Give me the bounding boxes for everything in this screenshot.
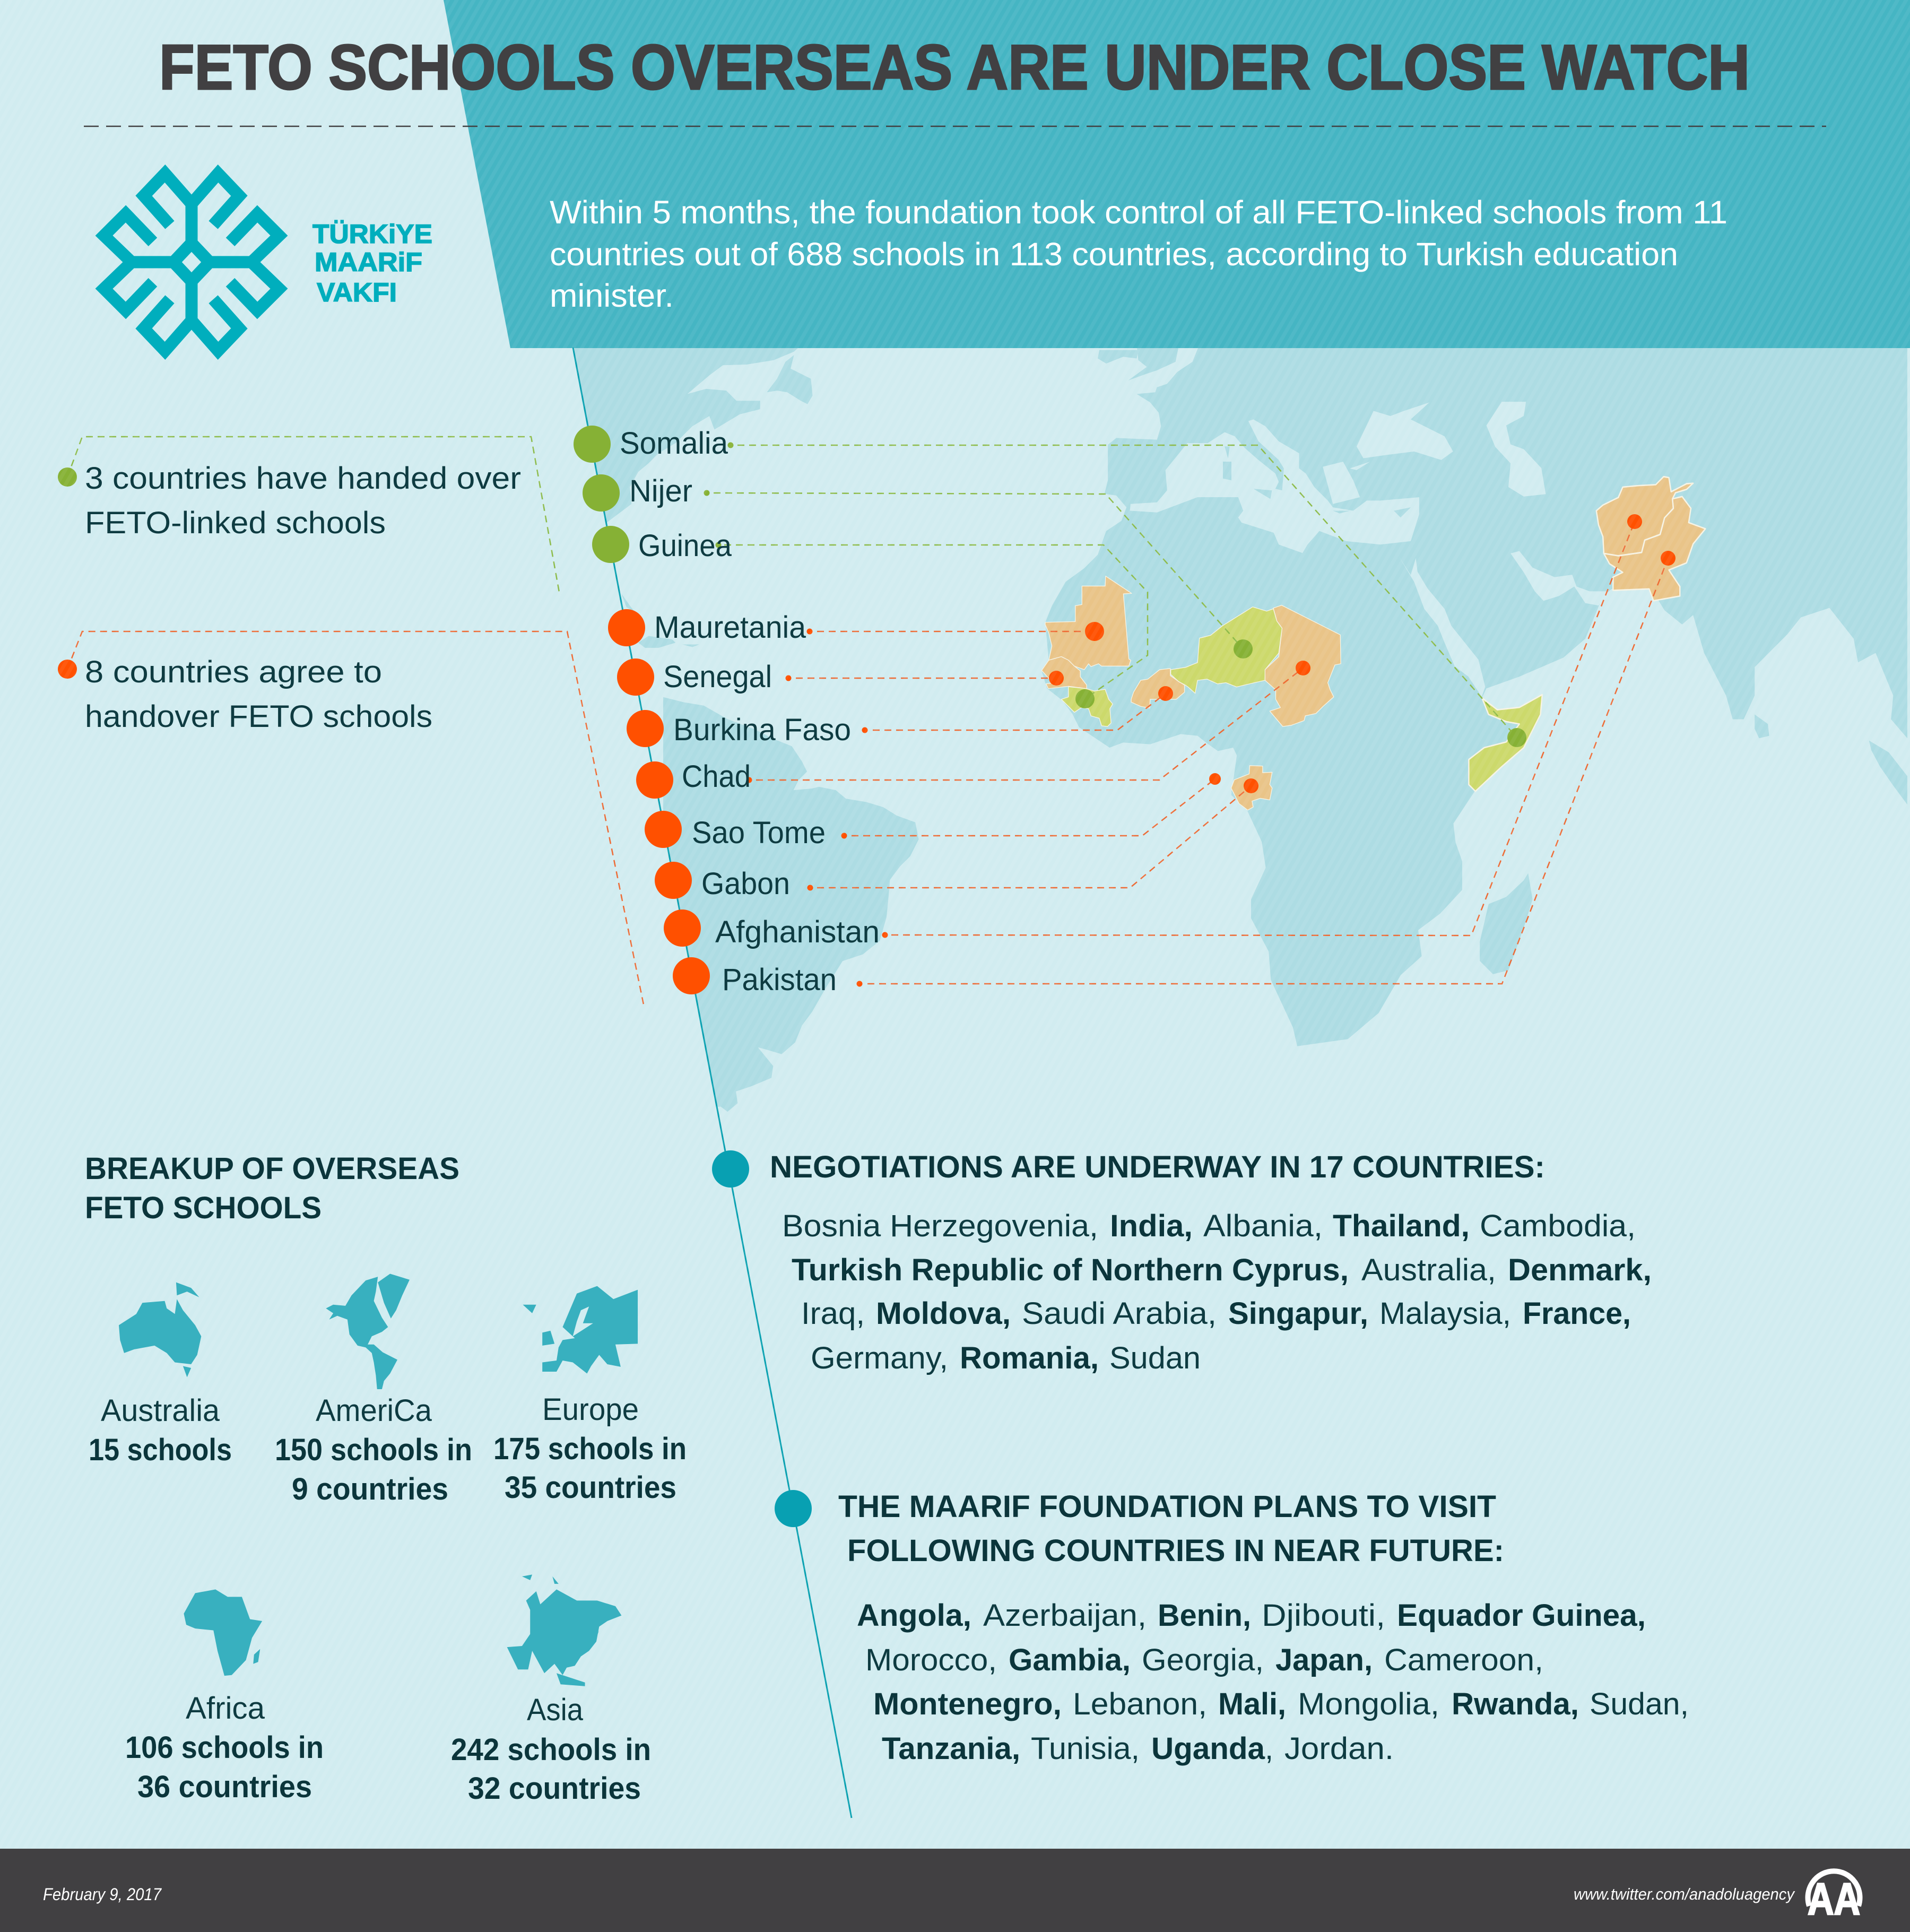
footer bar <box>0 1849 1910 1932</box>
continent: Asia <box>451 1574 651 1806</box>
text block: negotiation countries: Iraq, <box>801 1296 865 1331</box>
legend: agree to hand over: 8 countries agree to <box>85 655 382 689</box>
country labels: Gabon <box>701 867 790 901</box>
text block: planned visit countries: Mali, <box>1218 1687 1286 1721</box>
text block: negotiation countries: Denmark, <box>1508 1253 1652 1287</box>
text block: negotiation countries: France, <box>1523 1296 1631 1331</box>
text block: planned visit countries: Gambia, <box>1009 1643 1131 1677</box>
logo wordmark: VAKFI <box>317 278 397 307</box>
icon: America map <box>326 1274 410 1389</box>
continent: America <box>275 1274 472 1506</box>
footer source link: www.twitter.com/anadoluagency <box>1574 1885 1795 1903</box>
text block: planned visit countries: Lebanon, <box>1073 1687 1207 1721</box>
world map <box>557 345 1907 1112</box>
legend: handed over: 3 countries have handed over <box>85 461 521 496</box>
text block: negotiation countries: Thailand, <box>1333 1209 1470 1243</box>
country labels: Burkina Faso <box>673 713 851 747</box>
intro paragraph <box>550 194 1727 314</box>
text block: planned visit countries: Djibouti, <box>1262 1598 1385 1633</box>
continent: Asia: 32 countries <box>468 1771 641 1806</box>
text block: planned visit countries: Rwanda, <box>1452 1687 1579 1721</box>
continent: America: 150 schools in <box>275 1433 472 1467</box>
text block: negotiation countries: Romania, <box>960 1341 1099 1375</box>
country: Senegal <box>1041 656 1087 689</box>
land: North America <box>557 345 813 648</box>
continent: Europe: Europe <box>542 1392 639 1427</box>
map markers: orange <box>58 514 1675 987</box>
continent: Africa: 36 countries <box>137 1770 312 1804</box>
intro paragraph: Within 5 months, the foundation took control of all FETO-linked schools from 11 <box>550 194 1727 230</box>
legend: agree to hand over: handover FETO schools <box>85 699 432 734</box>
continent: Asia: 242 schools in <box>451 1732 651 1767</box>
text block: planned visit countries: Montenegro, <box>873 1687 1062 1721</box>
country labels: Nijer <box>629 474 692 508</box>
country: Guinea <box>1061 687 1113 726</box>
country labels: Sao Tome <box>692 816 826 850</box>
legend: handed over: FETO-linked schools <box>85 506 386 540</box>
text block: negotiation countries <box>782 1209 1652 1375</box>
continent: America: 9 countries <box>292 1472 448 1506</box>
country labels: Somalia <box>620 426 728 461</box>
heading: breakup: BREAKUP OF OVERSEAS <box>85 1151 459 1186</box>
text block: planned visit countries: Cameroon, <box>1384 1643 1543 1677</box>
text block: negotiation countries: India, <box>1110 1209 1193 1243</box>
continent: Australia: 15 schools <box>89 1433 232 1467</box>
country: Afghanistan <box>1596 476 1693 556</box>
timeline nodes: green countries <box>574 426 629 563</box>
text block: planned visit countries: Mongolia, <box>1298 1687 1439 1721</box>
country labels: Chad <box>682 759 751 794</box>
country: Somalia <box>1469 695 1542 791</box>
country: Gabon <box>1231 766 1272 810</box>
text block: negotiation countries: Cambodia, <box>1480 1209 1636 1243</box>
text block: planned visit countries: , <box>1265 1731 1273 1766</box>
seas: Mediterranean, Black Sea, Red Sea <box>1130 402 1485 697</box>
text block: negotiation countries: Sudan <box>1109 1341 1201 1375</box>
country: Niger <box>1171 607 1282 694</box>
logo wordmark: TÜRKiYE <box>312 219 432 249</box>
text block: planned visit countries: Morocco, <box>865 1643 997 1677</box>
continent: Australia <box>89 1283 232 1467</box>
text block: planned visit countries: Sudan, <box>1590 1687 1689 1721</box>
country labels: Pakistan <box>722 963 837 997</box>
text block: planned visit countries: Uganda <box>1151 1731 1265 1766</box>
text block: planned visit countries <box>857 1598 1689 1766</box>
continent: America: AmeriCa <box>316 1393 432 1428</box>
panel: intro background <box>444 0 1910 348</box>
land: Asia and East Africa <box>1207 345 1907 1046</box>
icon: Europe map <box>523 1286 638 1374</box>
text block: negotiation countries: Malaysia, <box>1379 1296 1511 1331</box>
Mediterranean islands <box>1223 446 1411 517</box>
text block: negotiation countries: Bosnia Herzegovenia, <box>782 1209 1098 1243</box>
country labels: Afghanistan <box>715 915 880 949</box>
icon: Australia map <box>119 1283 201 1377</box>
country labels <box>620 426 880 997</box>
text block: negotiation countries: Germany, <box>811 1341 948 1375</box>
continent: Australia: Australia <box>101 1393 220 1428</box>
timeline nodes: orange countries <box>608 609 710 994</box>
highlighted countries: green group <box>1061 607 1542 791</box>
legend: agree to hand over <box>85 655 432 734</box>
highlighted countries: orange group <box>1041 476 1705 810</box>
text block: negotiation countries: Singapur, <box>1228 1296 1368 1331</box>
legend: handed over <box>85 461 521 540</box>
country labels: Senegal <box>663 660 772 694</box>
seas: Caspian and Persian Gulf <box>1487 402 1608 605</box>
icon: Asia map <box>507 1574 621 1686</box>
continent: Africa <box>125 1589 324 1804</box>
text block: planned visit countries: Japan, <box>1275 1643 1373 1677</box>
text block: negotiation countries: Moldova, <box>876 1296 1011 1331</box>
country labels: Guinea <box>638 529 732 563</box>
timeline line <box>573 348 852 1818</box>
dashed connectors: orange <box>67 522 1668 1004</box>
country: Mauritania <box>1045 576 1132 670</box>
land: Europe and West Africa <box>1042 345 1279 876</box>
continent: Asia: Asia <box>527 1693 584 1727</box>
text block: planned visit countries: Georgia, <box>1142 1643 1264 1677</box>
text block: planned visit countries: Jordan. <box>1284 1731 1394 1766</box>
logo wordmark <box>312 219 432 307</box>
logo wordmark: MAARiF <box>315 247 422 277</box>
heading: breakup: FETO SCHOOLS <box>85 1191 322 1225</box>
heading: breakup <box>85 1151 459 1225</box>
timeline nodes: section bullets <box>712 1150 812 1527</box>
country labels: Mauretania <box>654 610 806 645</box>
footer date: February 9, 2017 <box>43 1885 162 1904</box>
continent: Europe: 175 schools in <box>493 1432 687 1466</box>
heading: planned visits: THE MAARIF FOUNDATION PLANS TO VISIT <box>838 1489 1496 1524</box>
icon: Africa map <box>184 1589 262 1676</box>
title: FETO SCHOOLS OVERSEAS ARE UNDER CLOSE WATCH <box>159 32 1750 103</box>
text block: planned visit countries: Angola, <box>857 1598 971 1633</box>
text block: negotiation countries: Turkish Republic of Northern Cyprus, <box>792 1253 1349 1287</box>
text block: negotiation countries: Saudi Arabia, <box>1022 1296 1217 1331</box>
text block: planned visit countries: Equador Guinea, <box>1397 1598 1646 1633</box>
land: South America <box>663 697 919 1112</box>
country: Burkina Faso <box>1131 669 1185 708</box>
intro paragraph: minister. <box>550 278 674 314</box>
continent: Europe: 35 countries <box>505 1470 676 1505</box>
intro paragraph: countries out of 688 schools in 113 countries, according to Turkish education <box>550 236 1678 272</box>
text block: negotiation countries: Albania, <box>1203 1209 1323 1243</box>
logo: Anadolu Agency: AA <box>1808 1874 1860 1924</box>
map markers: green <box>58 443 1526 747</box>
continent: Africa: Africa <box>186 1691 265 1726</box>
text block: planned visit countries: Azerbaijan, <box>983 1598 1147 1633</box>
logo mark: Maarif Foundation <box>104 174 279 351</box>
text block: planned visit countries: Tanzania, <box>882 1731 1020 1766</box>
text block: planned visit countries: Tunisia, <box>1031 1731 1140 1766</box>
heading: planned visits <box>838 1489 1504 1568</box>
country: Pakistan <box>1604 497 1705 601</box>
continent: Europe <box>493 1286 687 1505</box>
continent: Africa: 106 schools in <box>125 1730 324 1765</box>
heading: negotiations: NEGOTIATIONS ARE UNDERWAY IN 17 COUNTRIES: <box>770 1150 1545 1184</box>
heading: planned visits: FOLLOWING COUNTRIES IN NEAR FUTURE: <box>847 1534 1504 1568</box>
dashed connectors: green <box>67 437 1517 738</box>
country: Chad <box>1265 605 1341 726</box>
text block: planned visit countries: Benin, <box>1158 1598 1251 1633</box>
text block: negotiation countries: Australia, <box>1361 1253 1496 1287</box>
